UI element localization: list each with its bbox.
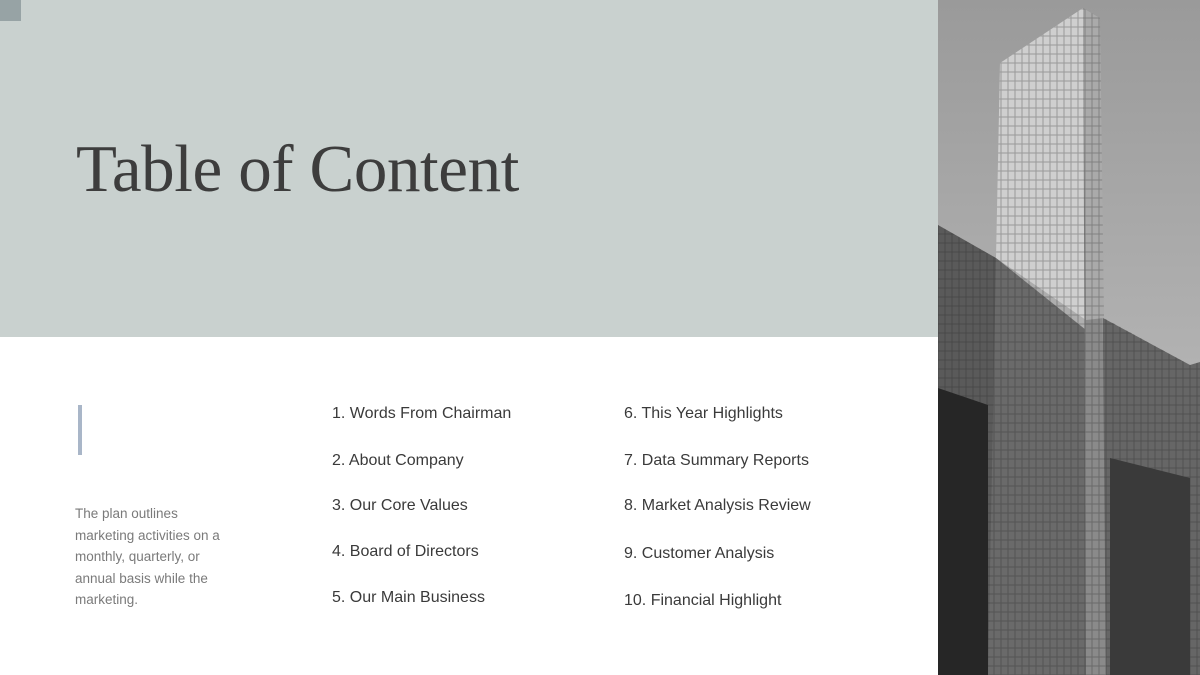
list column 1: [332, 405, 511, 606]
accent bar: [78, 405, 82, 455]
description text: The plan outlines marketing activities on a monthly, quarterly, or annual basis while the marketing.: [75, 506, 220, 607]
text: 6. This Year Highlights: [624, 405, 783, 422]
text: 10. Financial Highlight: [624, 592, 781, 609]
list column 2: [624, 405, 811, 609]
text: 2. About Company: [332, 452, 464, 469]
text: 8. Market Analysis Review: [624, 497, 811, 514]
text: 9. Customer Analysis: [624, 545, 774, 562]
photo: building: [938, 0, 1200, 675]
text: 3. Our Core Values: [332, 497, 468, 514]
text: 7. Data Summary Reports: [624, 452, 809, 469]
header panel: [0, 0, 938, 337]
corner square: [0, 0, 21, 21]
title: Table of Content: [76, 132, 519, 206]
text: 1. Words From Chairman: [332, 405, 511, 422]
text: 4. Board of Directors: [332, 543, 479, 560]
text: 5. Our Main Business: [332, 589, 485, 606]
